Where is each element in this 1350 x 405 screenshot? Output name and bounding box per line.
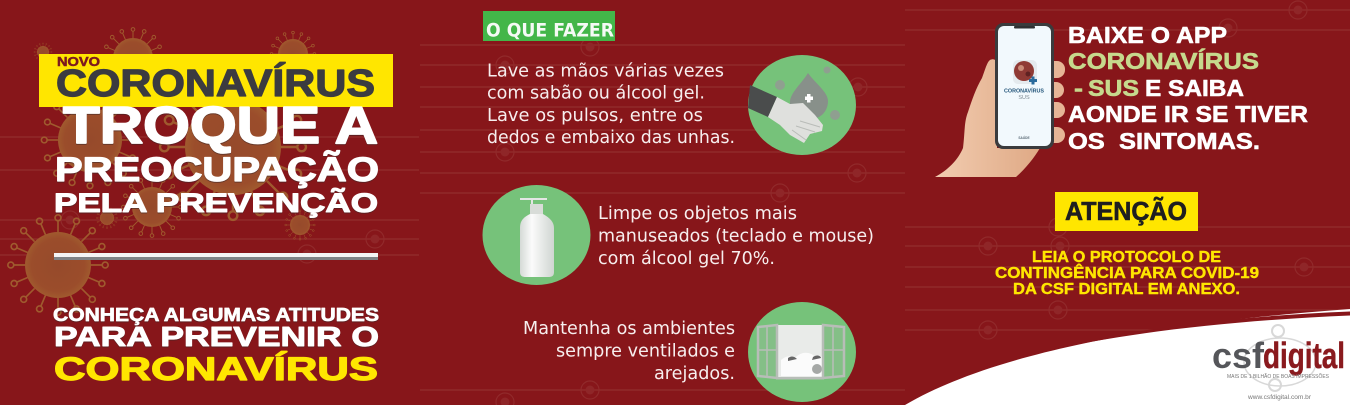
subheading line 1: CONHEÇA ALGUMAS ATITUDES	[53, 304, 379, 325]
phone body	[995, 23, 1054, 149]
middle panel: what to do	[482, 11, 874, 402]
text: download the app	[1068, 22, 1308, 154]
app icon	[1013, 60, 1037, 84]
heading: preocupacao: PREOCUPAÇÃO	[55, 151, 379, 189]
label: novo: NOVO	[57, 55, 100, 69]
subheading line 3: CORONAVÍRUS	[54, 351, 378, 387]
icon: hand washing	[748, 55, 856, 155]
protocol notice: DA CSF DIGITAL EM ANEXO.	[1013, 281, 1240, 298]
left panel: call to action	[53, 304, 379, 387]
logo ring	[1244, 338, 1316, 386]
virus illustrations	[8, 28, 316, 315]
heading: o que fazer: O QUE FAZER	[486, 20, 614, 42]
text: ventilate rooms: Mantenha os ambientes	[523, 319, 735, 339]
illustration: hand holding phone	[935, 23, 1065, 177]
app name: CORONAVÍRUS	[1004, 86, 1045, 94]
heading: troque a: TROQUE A	[63, 97, 378, 155]
fingers	[1045, 61, 1065, 143]
text: ventilate rooms: sempre ventilados e	[556, 342, 735, 362]
protocol notice: CONTINGÊNCIA PARA COVID-19	[995, 263, 1259, 282]
text: wash hands: Lave os pulsos, entre os	[487, 106, 703, 126]
text: download the app: E SAIBA	[1145, 75, 1244, 101]
icon: gel bottle	[482, 185, 590, 285]
attention label: ATENÇÃO	[1065, 196, 1187, 226]
app sub-name: SUS	[1018, 95, 1030, 101]
right panel: app promotion	[935, 22, 1308, 177]
text: wash hands: dedos e embaixo das unhas.	[487, 128, 735, 148]
icon: open window	[748, 302, 856, 402]
text: ventilate rooms	[523, 319, 735, 384]
logo url: www.csfdigital.com.br	[1247, 395, 1311, 401]
text: ventilate rooms: arejados.	[654, 364, 735, 384]
text: download the app: CORONAVÍRUS	[1068, 47, 1259, 74]
text: wash hands: Lave as mãos várias vezes	[487, 62, 724, 82]
text: wash hands	[487, 62, 735, 148]
divider rule	[54, 253, 378, 260]
green heading tag	[483, 11, 615, 41]
white footer swoosh	[905, 309, 1350, 405]
logo tagline: MAIS DE 1 BILHÃO DE BOAS IMPRESSÕES	[1227, 373, 1330, 380]
phone notch	[1014, 26, 1035, 28]
left panel: headline	[39, 54, 393, 218]
yellow attention box	[1055, 192, 1198, 231]
subheading line 2: PARA PREVENIR O	[54, 321, 379, 352]
text: download the app: AONDE IR SE TIVER	[1068, 101, 1308, 127]
text: wash hands: com sabão ou álcool gel.	[487, 84, 705, 104]
text: download the app: SUS	[1088, 75, 1139, 101]
protocol notice: LEIA O PROTOCOLO DE	[1032, 249, 1221, 266]
logo csf: csf	[1212, 335, 1265, 376]
yellow banner	[39, 54, 393, 107]
logo: csf digital	[1212, 325, 1345, 401]
text: clean objects: com álcool gel 70%.	[598, 249, 775, 269]
text: clean objects	[598, 204, 874, 269]
heading: pela prevencao: PELA PREVENÇÃO	[54, 187, 378, 218]
text: download the app: OS SINTOMAS.	[1068, 128, 1260, 154]
text: clean objects: Limpe os objetos mais	[598, 204, 797, 224]
text: download the app: BAIXE O APP	[1068, 22, 1227, 48]
heading: coronavirus: CORONAVÍRUS	[56, 61, 375, 105]
phone screen	[998, 26, 1051, 146]
attention callout	[995, 192, 1259, 298]
hand	[935, 59, 1040, 177]
protocol notice	[995, 249, 1259, 298]
ministry label: SAÚDE	[1018, 135, 1030, 140]
text: download the app: -	[1074, 75, 1083, 101]
text: clean objects: manuseados (teclado e mouse)	[598, 226, 874, 246]
